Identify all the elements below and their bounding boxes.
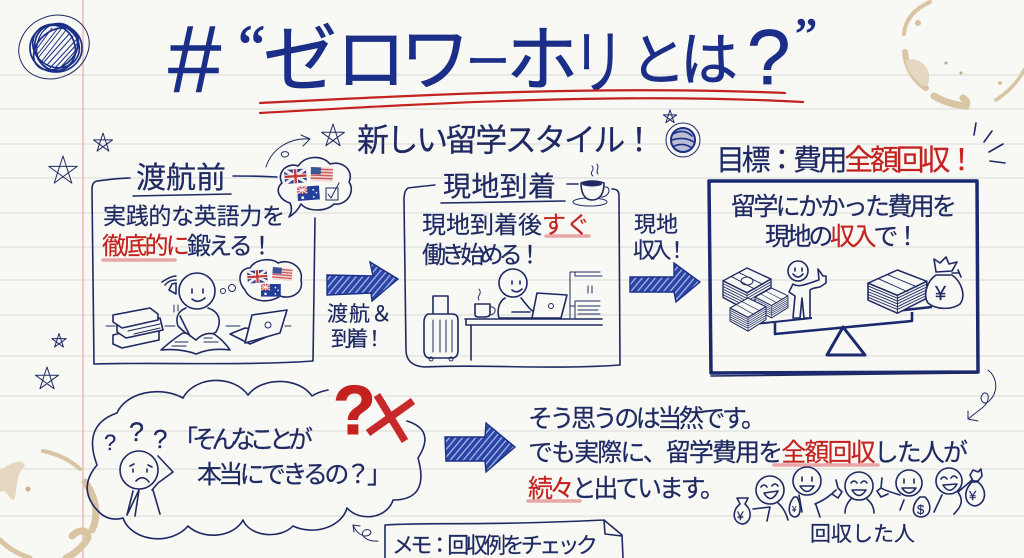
person — [499, 269, 527, 297]
answer text — [528, 405, 968, 503]
box frame — [709, 181, 978, 373]
label: people who recovered: 回収した人 — [810, 523, 915, 546]
title: ? — [747, 13, 790, 101]
small scribble — [666, 123, 700, 157]
person 2 — [789, 467, 842, 517]
thought cloud: 本当にできるの？」 — [197, 461, 392, 489]
panel: before departure — [92, 157, 351, 364]
scribble top left — [8, 4, 100, 90]
label: local income — [633, 212, 688, 263]
mug — [475, 304, 490, 317]
open book — [161, 333, 230, 354]
thought bubbles — [220, 288, 226, 294]
title: # — [168, 6, 221, 113]
title red underline — [260, 90, 803, 113]
question marks — [104, 417, 167, 455]
arrow to memo — [353, 525, 378, 541]
curved arrow down — [968, 370, 996, 421]
memo note — [385, 520, 623, 558]
title: リ — [573, 25, 624, 104]
goal heading: 目標：費用全額回収！ — [716, 144, 976, 177]
person 1: ¥ — [736, 509, 744, 523]
title: ホ — [506, 21, 578, 101]
panel: on arrival: 働き始める！ — [422, 242, 542, 269]
title — [168, 6, 817, 113]
question marks: ? — [153, 424, 167, 454]
answer text: そう思うのは当然です。 — [528, 405, 766, 433]
title: ロ — [336, 21, 406, 99]
books — [113, 326, 159, 348]
shelf — [570, 272, 602, 318]
title: ” — [795, 7, 817, 63]
coffee stain top right — [904, 2, 1024, 106]
person 5 — [934, 468, 984, 514]
title: ワ — [400, 21, 470, 99]
memo note: メモ：回収例をチェック — [392, 533, 598, 558]
person 4 — [877, 470, 930, 517]
worried figure — [120, 451, 173, 516]
panel: goal — [709, 181, 978, 376]
money: left — [723, 268, 771, 310]
label: departure and arrival: 渡航＆ — [327, 303, 392, 326]
question marks: ? — [104, 430, 116, 455]
title: ゼ — [263, 18, 337, 101]
curved arrow to subtitle — [266, 135, 310, 167]
heading: 現地到着 — [443, 171, 556, 202]
seesaw illustration — [723, 257, 963, 355]
title: “ — [238, 14, 266, 82]
money: right — [868, 270, 927, 313]
title: と — [630, 29, 686, 92]
answer text: 続々と出ています。 — [528, 475, 725, 503]
person 3 — [845, 472, 874, 513]
person 1 — [734, 476, 788, 524]
label: departure and arrival: 到着！ — [331, 328, 385, 351]
label: local income: 収入！ — [633, 238, 688, 263]
desk — [465, 319, 602, 325]
body text — [546, 234, 589, 238]
body text: 実践的な英語力を — [103, 203, 285, 229]
red question mark: ? — [333, 371, 376, 449]
panel: on arrival — [404, 164, 620, 367]
heading: 渡航前 — [136, 162, 226, 195]
thought cloud — [87, 371, 425, 539]
laptop — [532, 293, 567, 318]
money bag — [926, 275, 963, 308]
answer text: でも実際に、留学費用を全額回収した人が — [528, 439, 968, 467]
panel: goal: 現地の収入で！ — [765, 223, 920, 251]
title: は — [680, 28, 738, 93]
emphasised text: 徹底的に鍛える！ — [102, 233, 274, 260]
emphasis ticks — [974, 123, 1005, 163]
stars around subtitle and margin — [36, 110, 677, 389]
person thumbs up — [788, 261, 808, 281]
label: local income: 現地 — [634, 212, 678, 237]
quote text: 「そんなことが — [173, 426, 313, 454]
suitcase — [433, 296, 448, 313]
box frame — [92, 176, 315, 364]
person 2: ¥ — [791, 505, 797, 514]
panel: on arrival: 現地到着後すぐ — [422, 212, 590, 239]
label: departure and arrival — [327, 303, 392, 351]
seesaw illustration: ¥ — [934, 283, 947, 305]
person 5: ¥ — [968, 488, 977, 503]
laptop — [230, 328, 278, 344]
subtitle: 新しい留学スタイル！ — [357, 122, 655, 158]
study figure — [106, 260, 301, 354]
coffee stain bottom left — [0, 451, 96, 558]
arrow: income — [630, 263, 700, 302]
happy people group — [734, 467, 984, 524]
thought cloud: flags — [278, 157, 351, 217]
title: ー — [466, 38, 510, 87]
icon: coffee cup — [573, 164, 609, 206]
working figure — [424, 269, 602, 361]
person 4: $ — [917, 502, 925, 517]
arrow: answer — [445, 423, 515, 472]
body text: 留学にかかった費用を — [731, 193, 957, 221]
red cross — [368, 395, 413, 441]
box frame — [404, 184, 620, 367]
arrow: departure — [327, 262, 398, 301]
question marks: ? — [129, 417, 144, 447]
